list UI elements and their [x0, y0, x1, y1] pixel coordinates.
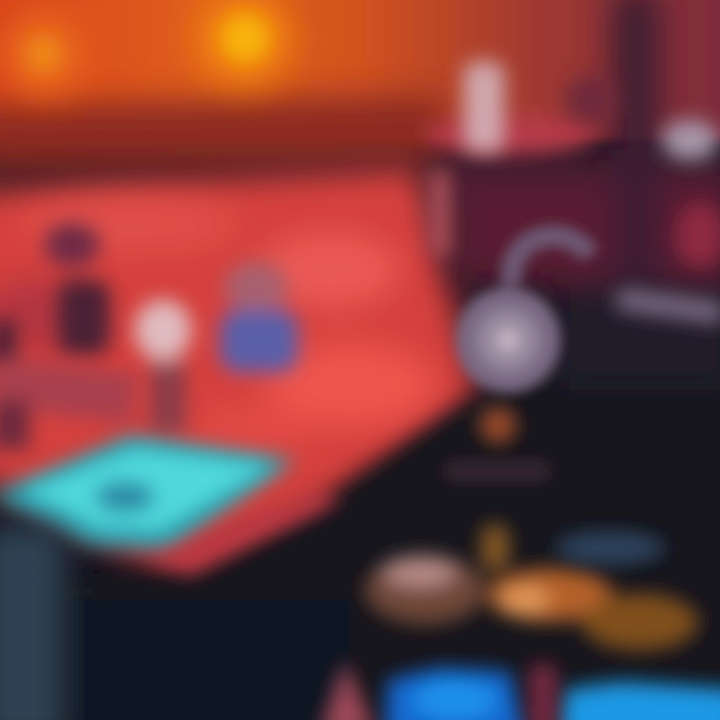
lower right dark region [0, 300, 720, 720]
dark horizon band [0, 95, 460, 172]
pile of food items [365, 525, 698, 650]
bright table highlights [0, 197, 435, 456]
right side dark cabinet [440, 0, 720, 390]
blue glowing screen right [558, 682, 720, 720]
cyan tablet glow [0, 435, 295, 550]
faint label shape [445, 462, 550, 480]
cyan tablet screen [20, 448, 275, 532]
pink cone bottom [320, 660, 556, 720]
shelf upper red glow [425, 115, 720, 267]
dark figure left [0, 223, 110, 370]
sun glow left [2, 12, 86, 96]
white bottle on shelf [464, 62, 504, 152]
red table surface [0, 165, 480, 570]
white object on table [135, 300, 191, 432]
blue padlock figure [220, 262, 298, 372]
red table front edge [150, 490, 340, 575]
blue glowing screen left [385, 668, 525, 720]
dark grey device bottom left [0, 525, 65, 720]
pink band left [0, 358, 137, 450]
grey object top right [564, 76, 718, 160]
grey bar at right [614, 288, 720, 324]
blue grey object above pile [555, 532, 665, 564]
sun glow right [197, 0, 293, 86]
circular grey ornament [456, 236, 590, 392]
small orange light [480, 407, 516, 443]
